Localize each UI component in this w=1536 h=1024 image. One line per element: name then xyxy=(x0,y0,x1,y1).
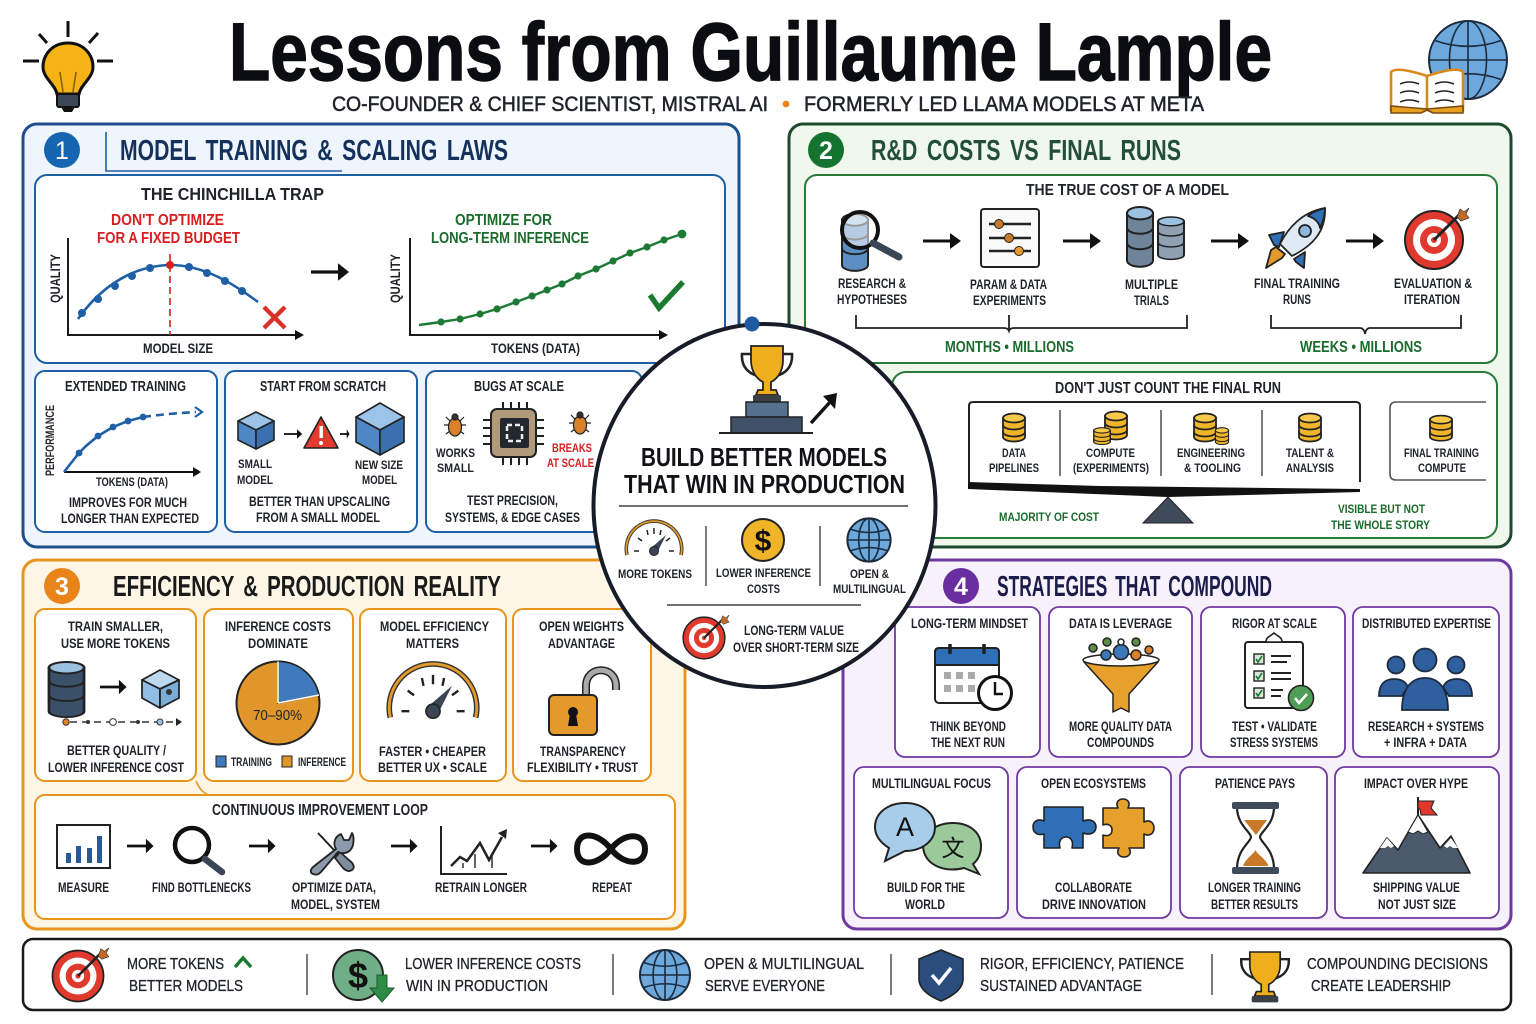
card: model efficiency matters: MATTERS xyxy=(406,636,459,651)
labels: FINAL TRAINING xyxy=(1254,276,1340,291)
takeaway: open and multilingual: SERVE EVERYONE xyxy=(705,978,825,995)
card: patience pays: LONGER TRAINING xyxy=(1208,880,1301,895)
labels: WORKS xyxy=(436,446,475,460)
labels: MODEL xyxy=(237,473,273,487)
scale pan: majority of cost: COMPUTE xyxy=(1086,446,1135,460)
icon: bug left xyxy=(444,414,466,436)
bracket: months xyxy=(856,315,1187,356)
card: model efficiency matters xyxy=(360,609,506,781)
caption: IMPROVES FOR MUCH xyxy=(69,495,187,510)
scale pan: majority of cost: DATA xyxy=(1002,446,1026,460)
labels: SMALL xyxy=(238,457,272,471)
card: train smaller: USE MORE TOKENS xyxy=(61,636,170,651)
badge 3 xyxy=(44,568,80,604)
connector xyxy=(196,781,208,795)
card: continuous improvement loop: CONTINUOUS IMPROVEMENT LOOP xyxy=(212,802,428,819)
takeaway: lower inference costs: LOWER INFERENCE COSTS xyxy=(405,956,581,973)
heading 2: R&D COSTS VS FINAL RUNS xyxy=(871,135,1181,167)
item: long-term value: LONG-TERM VALUE xyxy=(744,623,844,638)
card: rigor at scale: RIGOR AT SCALE xyxy=(1232,616,1317,631)
icon: speech bubbles: A xyxy=(896,812,914,842)
card: open ecosystems xyxy=(1017,767,1171,918)
card: extended training: EXTENDED TRAINING xyxy=(65,379,186,395)
labels: MODEL, SYSTEM xyxy=(291,897,380,912)
card: extended training xyxy=(35,371,217,532)
icon: people xyxy=(1379,648,1472,710)
item: open and multilingual xyxy=(833,518,906,596)
scale pan: final training compute xyxy=(1390,402,1486,480)
labels: BREAKS xyxy=(552,441,592,455)
icon: open lock xyxy=(549,670,616,735)
chart: quality vs tokens: QUALITY xyxy=(388,254,403,303)
caption: fixed budget warning xyxy=(97,212,240,247)
card: start from scratch xyxy=(225,371,417,532)
arrow xyxy=(127,839,154,853)
card: distributed expertise: DISTRIBUTED EXPERTISE xyxy=(1362,616,1491,631)
heading 1 xyxy=(106,132,508,171)
caption xyxy=(445,493,580,525)
labels: REPEAT xyxy=(592,880,633,895)
icon: hourglass xyxy=(1232,802,1279,874)
chart: quality vs tokens xyxy=(388,230,686,356)
scale pan: majority of cost: ENGINEERING xyxy=(1177,446,1245,460)
badge 2: 2 xyxy=(819,137,833,165)
labels: FIND BOTTLENECKS xyxy=(152,880,251,895)
chart: quality vs tokens: TOKENS (DATA) xyxy=(491,341,580,356)
card: bugs at scale xyxy=(426,371,642,532)
icon: database trials xyxy=(1127,207,1184,267)
card: data is leverage: DATA IS LEVERAGE xyxy=(1069,616,1172,631)
heading 1: MODEL TRAINING & SCALING LAWS xyxy=(120,135,508,167)
card: don't just count the final run xyxy=(892,372,1497,538)
arrow xyxy=(923,233,961,249)
arrow xyxy=(1063,233,1101,249)
card: open weights advantage: OPEN WEIGHTS xyxy=(539,619,624,634)
card: patience pays xyxy=(1180,767,1327,918)
card: distributed expertise: + INFRA + DATA xyxy=(1384,735,1467,750)
bracket: months: MONTHS • MILLIONS xyxy=(945,339,1074,356)
takeaway: rigor: SUSTAINED ADVANTAGE xyxy=(980,978,1142,995)
labels: AT SCALE xyxy=(547,456,594,470)
takeaway: compounding decisions: CREATE LEADERSHIP xyxy=(1311,978,1451,995)
icon: gauge xyxy=(389,664,477,718)
card: impact over hype: NOT JUST SIZE xyxy=(1378,897,1456,912)
chart: performance curve xyxy=(43,405,202,489)
labels: MULTIPLE xyxy=(1125,277,1178,292)
panel 2: R&D costs vs final runs xyxy=(789,124,1511,547)
labels xyxy=(237,457,403,487)
icon: sliders xyxy=(981,209,1039,267)
icon: puzzle pieces xyxy=(1033,799,1154,857)
chart: quality vs model size xyxy=(48,238,304,356)
headline: BUILD BETTER MODELS xyxy=(641,442,887,472)
card: rigor at scale: TEST • VALIDATE xyxy=(1232,719,1317,734)
balance beam and fulcrum xyxy=(968,482,1360,523)
card: model efficiency matters: MODEL EFFICIENCY xyxy=(380,619,489,634)
heading 4: STRATEGIES THAT COMPOUND xyxy=(997,571,1272,603)
card: inference costs dominate: DOMINATE xyxy=(248,636,308,651)
badge 2 xyxy=(808,132,844,168)
item: more tokens: MORE TOKENS xyxy=(618,567,692,581)
card: don't just count the final run: DON'T JUST COUNT THE FINAL RUN xyxy=(1055,380,1281,397)
caption: visible but not the whole story xyxy=(1331,502,1430,532)
chart: quality vs model size: MODEL SIZE xyxy=(143,341,213,356)
card: patience pays: PATIENCE PAYS xyxy=(1215,776,1295,791)
card: true cost of a model: THE TRUE COST OF A MODEL xyxy=(1026,182,1229,199)
caption: TEST PRECISION, xyxy=(467,493,558,508)
caption: majority of cost: MAJORITY OF COST xyxy=(999,510,1100,524)
item: lower inference costs: $ xyxy=(755,525,772,558)
labels: EXPERIMENTS xyxy=(973,293,1046,308)
labels: SMALL xyxy=(437,461,474,475)
arrow xyxy=(1346,233,1384,249)
card: impact over hype: SHIPPING VALUE xyxy=(1373,880,1460,895)
labels xyxy=(837,276,1472,308)
caption: fixed budget warning: FOR A FIXED BUDGET xyxy=(97,230,240,247)
caption: visible but not the whole story: VISIBLE BUT NOT xyxy=(1338,502,1426,516)
icon: target xyxy=(1405,208,1469,269)
badge 3: 3 xyxy=(55,573,69,601)
icon: speech bubbles: 文 xyxy=(942,835,964,861)
icon: bar chart xyxy=(57,825,110,868)
scale pan: majority of cost: ANALYSIS xyxy=(1286,461,1334,475)
takeaway: open and multilingual xyxy=(640,950,864,1000)
card: distributed expertise: RESEARCH + SYSTEMS xyxy=(1368,719,1484,734)
card: train smaller xyxy=(35,609,196,781)
icon: chip xyxy=(483,402,544,465)
card: distributed expertise xyxy=(1353,607,1499,757)
icon: growth chart xyxy=(441,826,507,874)
legend: TRAINING xyxy=(231,755,272,769)
icon: light bulb xyxy=(23,21,113,112)
icon: checklist xyxy=(1245,633,1314,710)
chart: performance curve: TOKENS (DATA) xyxy=(96,475,168,489)
takeaway: more tokens xyxy=(52,948,251,1002)
caption: long-term inference: LONG-TERM INFERENCE xyxy=(431,230,589,247)
labels xyxy=(58,880,633,912)
card: chinchilla trap: THE CHINCHILLA TRAP xyxy=(141,184,324,204)
caption: long-term inference xyxy=(431,212,589,247)
badge 4 xyxy=(943,568,979,604)
takeaway: rigor: RIGOR, EFFICIENCY, PATIENCE xyxy=(980,956,1184,973)
labels: MEASURE xyxy=(58,880,109,895)
icon: magnifier xyxy=(175,828,222,872)
icon: warning triangle xyxy=(304,417,338,448)
card: long-term mindset: THINK BEYOND xyxy=(930,719,1006,734)
card: true cost of a model xyxy=(805,175,1497,363)
arrow xyxy=(391,839,418,853)
card: data is leverage xyxy=(1049,607,1192,757)
subtitle: CO-FOUNDER & CHIEF SCIENTIST, MISTRAL AI xyxy=(332,93,768,116)
card: multilingual focus xyxy=(854,767,1008,918)
labels: RUNS xyxy=(1283,292,1311,307)
card: start from scratch: START FROM SCRATCH xyxy=(260,379,386,395)
card: inference costs dominate xyxy=(204,609,353,781)
icon: trophy on podium xyxy=(719,346,837,433)
icon: calendar and clock xyxy=(935,644,1012,710)
arrow xyxy=(531,839,558,853)
card: model efficiency matters: FASTER • CHEAPER xyxy=(379,744,486,759)
arrow xyxy=(1211,233,1249,249)
scale pan: majority of cost xyxy=(969,402,1360,482)
labels xyxy=(436,441,594,475)
panel 4: strategies that compound xyxy=(843,560,1511,929)
icon: rocket xyxy=(1266,208,1325,268)
icon: mountain and flag xyxy=(1363,797,1470,873)
arrow xyxy=(340,429,350,439)
takeaway: lower inference costs xyxy=(333,950,581,1002)
caption: visible but not the whole story: THE WHOLE STORY xyxy=(1331,518,1430,532)
item: open and multilingual: OPEN & xyxy=(850,567,889,581)
badge 1 xyxy=(44,132,80,168)
legend xyxy=(216,755,346,769)
card: long-term mindset: LONG-TERM MINDSET xyxy=(911,616,1029,631)
card: impact over hype xyxy=(1335,767,1499,918)
scale pan: majority of cost: TALENT & xyxy=(1286,446,1334,460)
item: lower inference costs: COSTS xyxy=(747,582,780,596)
card: long-term mindset xyxy=(895,607,1040,757)
takeaway: more tokens: MORE TOKENS xyxy=(127,956,224,973)
caption: BETTER THAN UPSCALING xyxy=(249,494,390,509)
icon: infinity xyxy=(577,835,645,863)
card: open ecosystems: OPEN ECOSYSTEMS xyxy=(1041,776,1146,791)
badge 4: 4 xyxy=(954,573,968,601)
title: Lessons from Guillaume Lample xyxy=(229,7,1272,98)
card: bugs at scale: BUGS AT SCALE xyxy=(474,379,564,395)
icon: globe and book xyxy=(1391,21,1507,113)
headline: THAT WIN IN PRODUCTION xyxy=(624,469,905,499)
card: rigor at scale xyxy=(1201,607,1345,757)
icon: small cube xyxy=(238,412,274,449)
item: open and multilingual: MULTILINGUAL xyxy=(833,582,906,596)
token path xyxy=(63,718,182,726)
card: train smaller: TRAIN SMALLER, xyxy=(68,619,163,634)
heading 3: EFFICIENCY & PRODUCTION REALITY xyxy=(113,571,501,603)
headline xyxy=(624,442,905,499)
icon: speech bubbles xyxy=(875,803,981,874)
item: long-term value: OVER SHORT-TERM SIZE xyxy=(733,640,859,655)
scale pan: final training compute: COMPUTE xyxy=(1418,461,1466,475)
subtitle: FORMERLY LED LLAMA MODELS AT META xyxy=(804,93,1204,116)
takeaway: rigor xyxy=(919,950,1184,1001)
caption: LONGER THAN EXPECTED xyxy=(61,511,199,526)
scale pan: majority of cost: (EXPERIMENTS) xyxy=(1073,461,1149,475)
card: rigor at scale: STRESS SYSTEMS xyxy=(1230,735,1318,750)
panel 3: efficiency and production reality xyxy=(23,560,685,929)
pie chart: 70–90% xyxy=(253,708,302,724)
card: open weights advantage xyxy=(513,609,651,781)
card: multilingual focus: BUILD FOR THE xyxy=(887,880,965,895)
labels: RESEARCH & xyxy=(838,276,906,291)
icon: database to cube xyxy=(49,662,179,717)
labels: PARAM & DATA xyxy=(970,277,1047,292)
pie chart xyxy=(236,661,320,744)
bracket: weeks: WEEKS • MILLIONS xyxy=(1300,339,1422,356)
card: data is leverage: COMPOUNDS xyxy=(1087,735,1154,750)
labels: OPTIMIZE DATA, xyxy=(292,880,376,895)
card: multilingual focus: WORLD xyxy=(905,897,945,912)
caption: fixed budget warning: DON'T OPTIMIZE xyxy=(111,212,224,229)
caption: long-term inference: OPTIMIZE FOR xyxy=(455,212,552,229)
arrow xyxy=(311,263,349,281)
caption: FROM A SMALL MODEL xyxy=(256,510,380,525)
card: open ecosystems: COLLABORATE xyxy=(1055,880,1132,895)
icon: funnel xyxy=(1083,638,1159,712)
caption xyxy=(61,495,199,526)
labels: MODEL xyxy=(362,473,397,487)
card: open ecosystems: DRIVE INNOVATION xyxy=(1042,897,1146,912)
card: data is leverage: MORE QUALITY DATA xyxy=(1069,719,1172,734)
connector dot xyxy=(744,316,760,332)
card: patience pays: BETTER RESULTS xyxy=(1211,897,1298,912)
badge 1: 1 xyxy=(55,137,69,165)
card: multilingual focus: MULTILINGUAL FOCUS xyxy=(872,776,991,791)
central hub circle xyxy=(594,316,936,687)
icon: large cube xyxy=(356,403,404,455)
subtitle xyxy=(332,93,1204,116)
chart: quality vs model size: QUALITY xyxy=(48,254,63,303)
takeaway: compounding decisions: COMPOUNDING DECISIONS xyxy=(1307,956,1488,973)
labels: HYPOTHESES xyxy=(837,292,907,307)
item: lower inference costs: LOWER INFERENCE xyxy=(716,566,811,580)
takeaway: compounding decisions xyxy=(1241,952,1488,1002)
icon: wrench and screwdriver xyxy=(311,833,354,875)
card: open weights advantage: FLEXIBILITY • TRUST xyxy=(527,760,639,775)
card: train smaller: BETTER QUALITY / xyxy=(67,743,166,758)
takeaway: more tokens: BETTER MODELS xyxy=(129,978,243,995)
panel 1: model training and scaling laws xyxy=(23,124,739,547)
item: more tokens xyxy=(618,521,692,581)
item: long-term value xyxy=(683,615,859,659)
takeaway: open and multilingual: OPEN & MULTILINGUAL xyxy=(704,956,864,973)
caption: SYSTEMS, & EDGE CASES xyxy=(445,510,580,525)
card: continuous improvement loop xyxy=(35,795,675,919)
card: chinchilla trap xyxy=(35,175,725,363)
card: open weights advantage: TRANSPARENCY xyxy=(540,744,626,759)
arrow xyxy=(249,839,276,853)
takeaway: lower inference costs: $ xyxy=(348,955,368,996)
card: train smaller: LOWER INFERENCE COST xyxy=(48,760,185,775)
bracket: weeks xyxy=(1271,315,1461,356)
icon: bug right xyxy=(569,412,591,434)
card: open weights advantage: ADVANTAGE xyxy=(548,636,615,651)
item: lower inference costs xyxy=(716,519,811,596)
card: long-term mindset: THE NEXT RUN xyxy=(931,735,1005,750)
labels: NEW SIZE xyxy=(355,458,403,472)
icon: research xyxy=(842,212,899,271)
legend: INFERENCE xyxy=(298,755,346,769)
bottom summary bar xyxy=(23,939,1511,1010)
labels: EVALUATION & xyxy=(1394,276,1472,291)
labels: TRIALS xyxy=(1134,293,1169,308)
scale pan: final training compute: FINAL TRAINING xyxy=(1404,446,1479,460)
scale pan: majority of cost: & TOOLING xyxy=(1184,461,1241,475)
arrow xyxy=(284,429,302,439)
card: model efficiency matters: BETTER UX • SCALE xyxy=(378,760,487,775)
labels: RETRAIN LONGER xyxy=(435,880,527,895)
card: inference costs dominate: INFERENCE COSTS xyxy=(225,619,331,634)
takeaway: lower inference costs: WIN IN PRODUCTION xyxy=(406,978,548,995)
card: impact over hype: IMPACT OVER HYPE xyxy=(1364,776,1468,791)
labels: ITERATION xyxy=(1404,292,1460,307)
scale pan: majority of cost: PIPELINES xyxy=(989,461,1039,475)
caption xyxy=(249,494,390,525)
chart: performance curve: PERFORMANCE xyxy=(43,405,57,476)
